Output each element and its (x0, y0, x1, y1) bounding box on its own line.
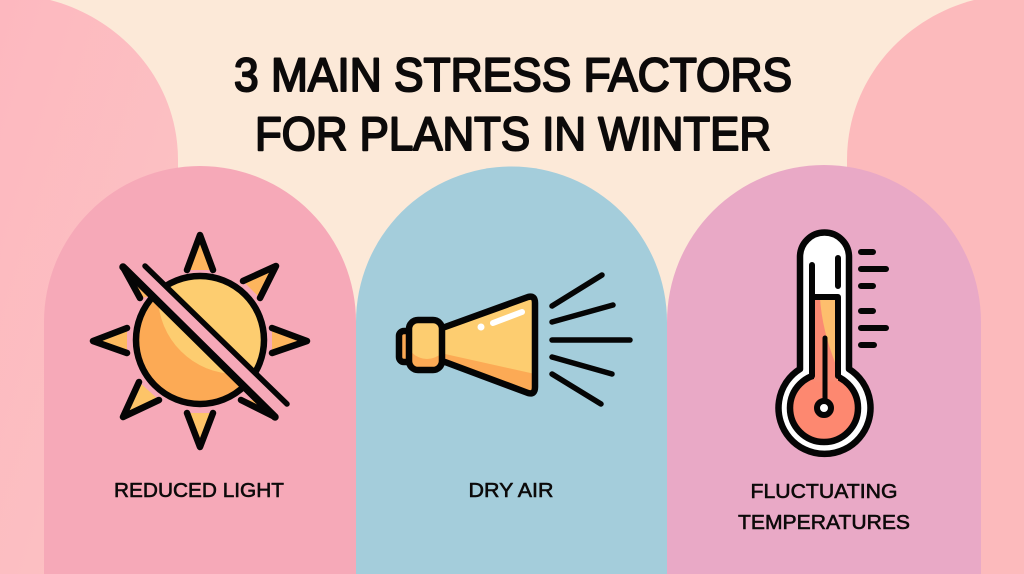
bulb (790, 374, 858, 442)
sun disc (132, 272, 268, 408)
collar (406, 317, 448, 370)
panel: dry air (356, 166, 667, 574)
sun rays (93, 235, 307, 447)
highlights (478, 312, 522, 330)
left backdrop arch (0, 0, 178, 574)
tube walls (812, 258, 838, 376)
slash (123, 266, 287, 417)
label: DRY AIR (468, 479, 554, 502)
tick marks (861, 252, 886, 345)
icon: air blower (399, 275, 630, 404)
mercury column (814, 298, 838, 382)
icon: crossed-out sun (93, 218, 314, 447)
stem (822, 338, 828, 402)
thermometer outline (778, 232, 870, 454)
air lines (552, 275, 630, 404)
label (738, 480, 910, 534)
right backdrop arch (847, 0, 1024, 574)
horn (445, 297, 535, 396)
title (234, 48, 792, 160)
title: FOR PLANTS IN WINTER (255, 107, 771, 160)
label: REDUCED LIGHT (114, 479, 284, 502)
panel: fluctuating temperatures (667, 165, 981, 574)
title: 3 MAIN STRESS FACTORS (234, 48, 792, 101)
panel: reduced light (44, 166, 356, 574)
nozzle cap (399, 331, 411, 362)
label: TEMPERATURES (738, 511, 910, 534)
label: FLUCTUATING (750, 480, 898, 503)
icon: thermometer (778, 232, 886, 454)
bulb centre (817, 401, 831, 415)
